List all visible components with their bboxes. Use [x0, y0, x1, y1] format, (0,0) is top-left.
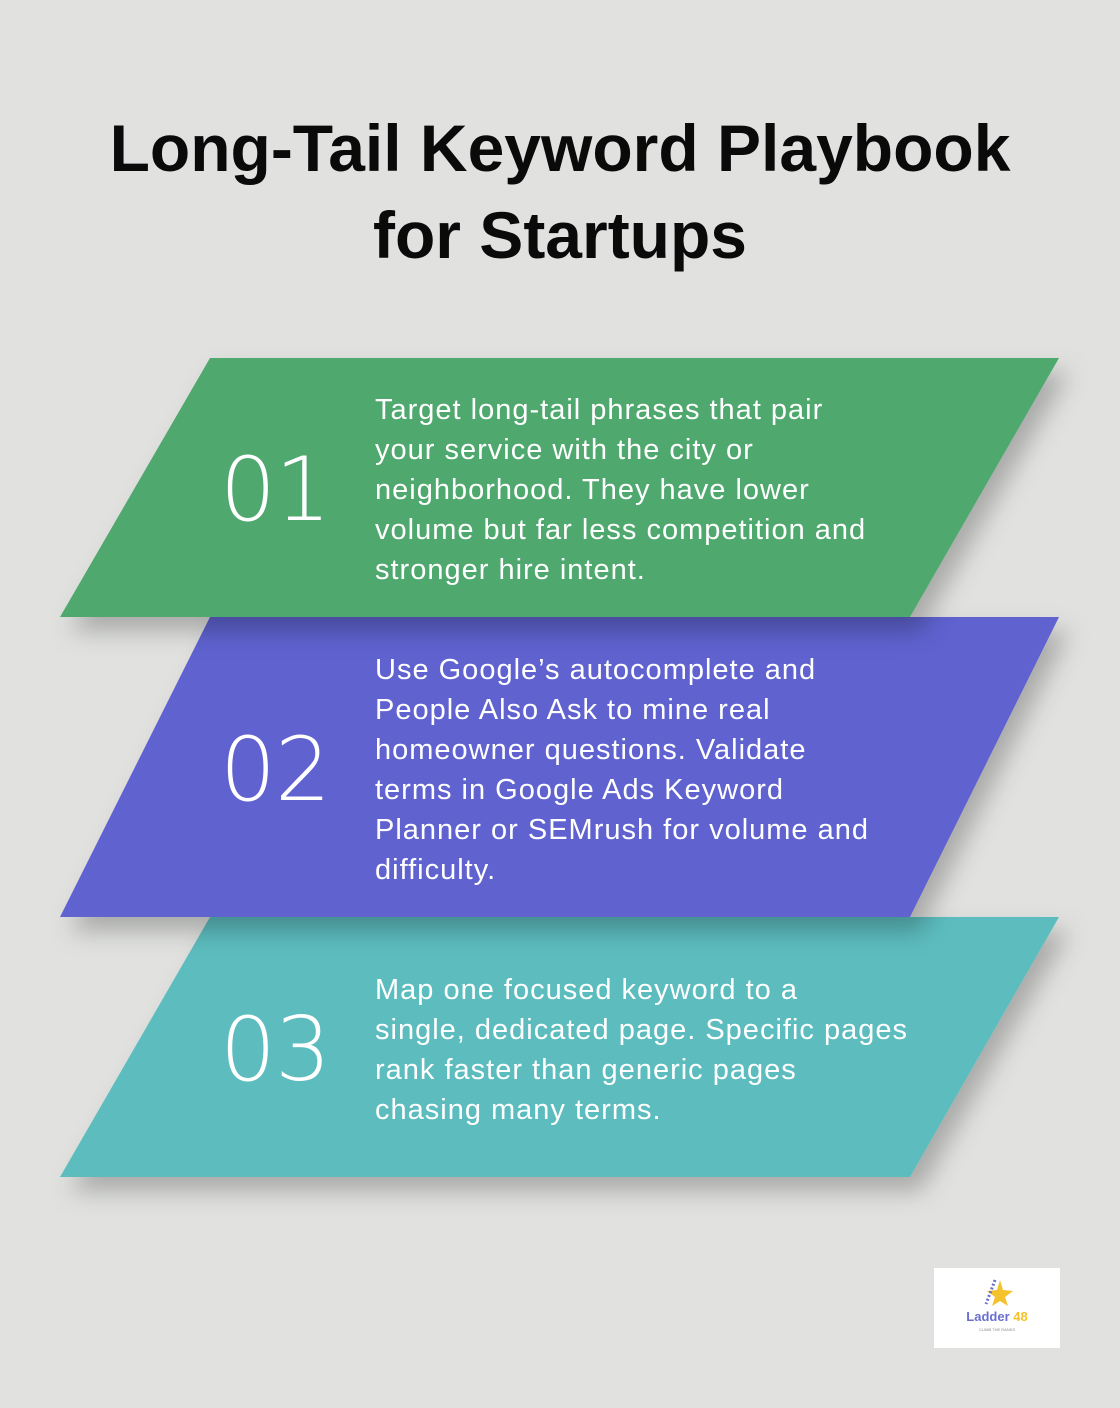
text 02: Planner or SEMrush for volume and: [375, 814, 869, 846]
text 02: homeowner questions. Validate: [375, 734, 806, 766]
text 02: difficulty.: [375, 854, 496, 886]
number 02: 02: [220, 718, 330, 821]
text 03: rank faster than generic pages: [375, 1054, 797, 1086]
logo: CLIMB THE RANKS: [979, 1327, 1015, 1332]
text 03: single, dedicated page. Specific pages: [375, 1014, 908, 1046]
number 01: 01: [220, 438, 330, 541]
text 02: Use Google’s autocomplete and: [375, 654, 816, 686]
text 02: terms in Google Ads Keyword: [375, 774, 784, 806]
text 03: [375, 974, 908, 1126]
logo: [934, 1268, 1060, 1348]
panel 2 shape: [60, 617, 1059, 917]
text 01: volume but far less competition and: [375, 514, 866, 546]
text 01: neighborhood. They have lower: [375, 474, 810, 506]
text 01: [375, 394, 866, 586]
text 03: Map one focused keyword to a: [375, 974, 798, 1006]
text 02: [375, 654, 869, 886]
text 01: stronger hire intent.: [375, 554, 646, 586]
text 03: chasing many terms.: [375, 1094, 662, 1126]
title: [110, 111, 1010, 272]
panel 1 shape: [60, 358, 1059, 617]
title: for Startups: [373, 198, 747, 272]
title: Long-Tail Keyword Playbook: [110, 111, 1010, 185]
text 01: Target long-tail phrases that pair: [375, 394, 823, 426]
text 01: your service with the city or: [375, 434, 754, 466]
number 03: 03: [220, 998, 330, 1101]
panel 3 shape: [60, 917, 1059, 1177]
text 02: People Also Ask to mine real: [375, 694, 771, 726]
logo: Ladder 48: [966, 1309, 1028, 1324]
